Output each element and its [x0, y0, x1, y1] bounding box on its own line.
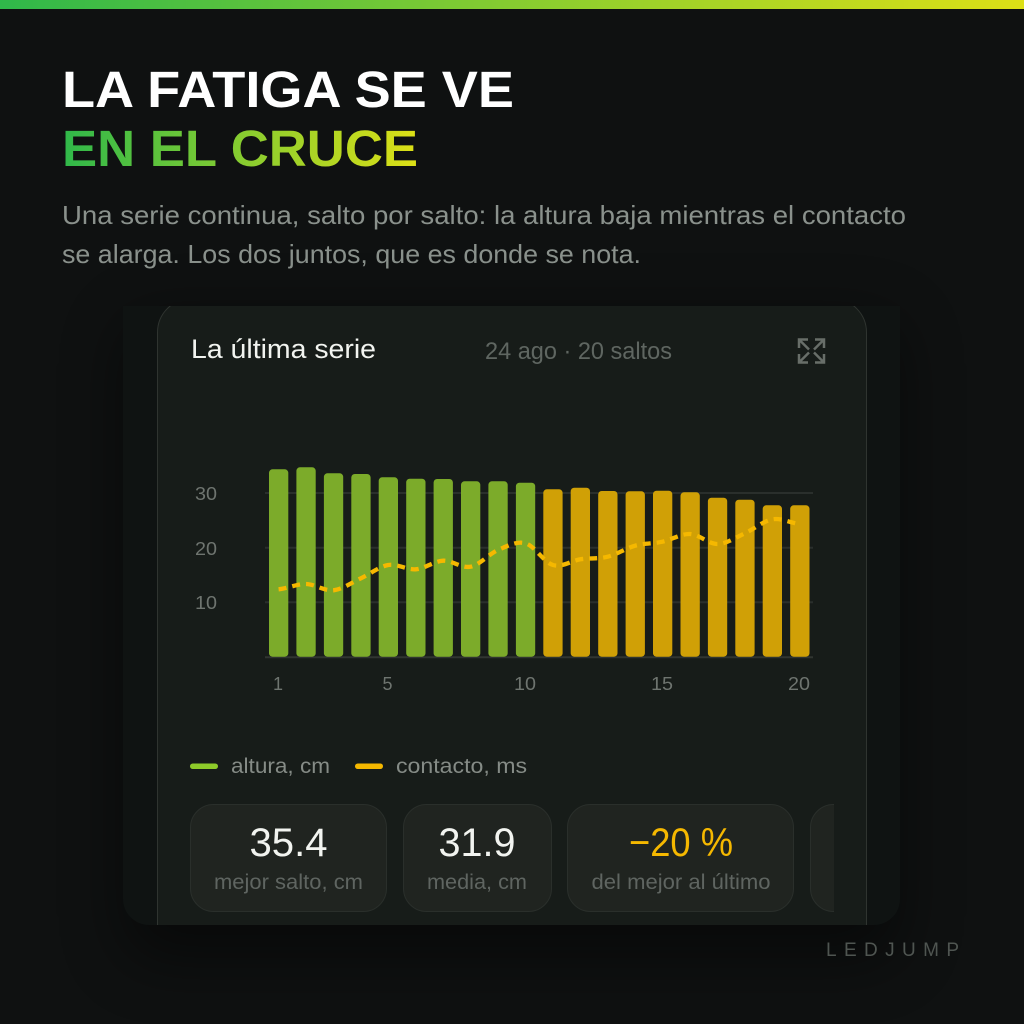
title: LA FATIGA SE VE	[62, 61, 514, 118]
brand wordmark: LEDJUMP	[826, 940, 959, 961]
y axis labels: 30	[195, 484, 217, 504]
title	[62, 61, 514, 177]
date and jump count: 24 ago · 20 saltos	[485, 338, 672, 365]
stat: best jump: 35.4	[250, 821, 328, 865]
stat: best to last drop	[568, 804, 794, 912]
card shadow	[123, 320, 900, 960]
stat: best to last drop: del mejor al último	[592, 870, 771, 894]
stat: average	[404, 804, 552, 912]
y axis labels: 20	[195, 539, 217, 559]
x axis labels: 1	[273, 674, 283, 694]
x axis labels: 15	[651, 674, 673, 694]
stat: clipped next card	[810, 804, 834, 912]
x axis labels: 10	[514, 674, 536, 694]
subtitle text	[62, 200, 906, 269]
contact time dashed line	[279, 519, 800, 590]
title: EN EL CRUCE	[62, 120, 418, 177]
green bars: jumps 1 to 10	[269, 467, 535, 657]
x axis labels: 5	[382, 674, 393, 694]
icon: expand arrows	[799, 340, 824, 362]
chart: height bars and contact line	[195, 467, 813, 694]
stat: best jump: mejor salto, cm	[214, 870, 363, 894]
top gradient bar	[0, 0, 1024, 9]
stat: best jump	[190, 804, 386, 912]
y axis labels: 10	[195, 593, 217, 613]
subtitle text: se alarga. Los dos juntos, que es donde se nota.	[62, 239, 641, 269]
amber bars: jumps 11 to 20	[543, 488, 810, 657]
panel: last series card	[148, 306, 875, 925]
stat: best to last drop: −20 %	[629, 821, 733, 865]
legend: contacto, ms	[396, 754, 527, 778]
y axis labels	[195, 484, 217, 613]
stat: average: media, cm	[427, 870, 527, 894]
card heading: La última serie	[191, 334, 376, 364]
subtitle text: Una serie continua, salto por salto: la altura baja mientras el contacto	[62, 200, 906, 230]
legend: altura, cm	[231, 754, 330, 778]
x axis labels	[274, 677, 810, 690]
x axis labels: 20	[788, 674, 810, 694]
stat: average: 31.9	[438, 821, 516, 865]
stat cards row	[190, 804, 834, 912]
legend	[190, 758, 526, 776]
